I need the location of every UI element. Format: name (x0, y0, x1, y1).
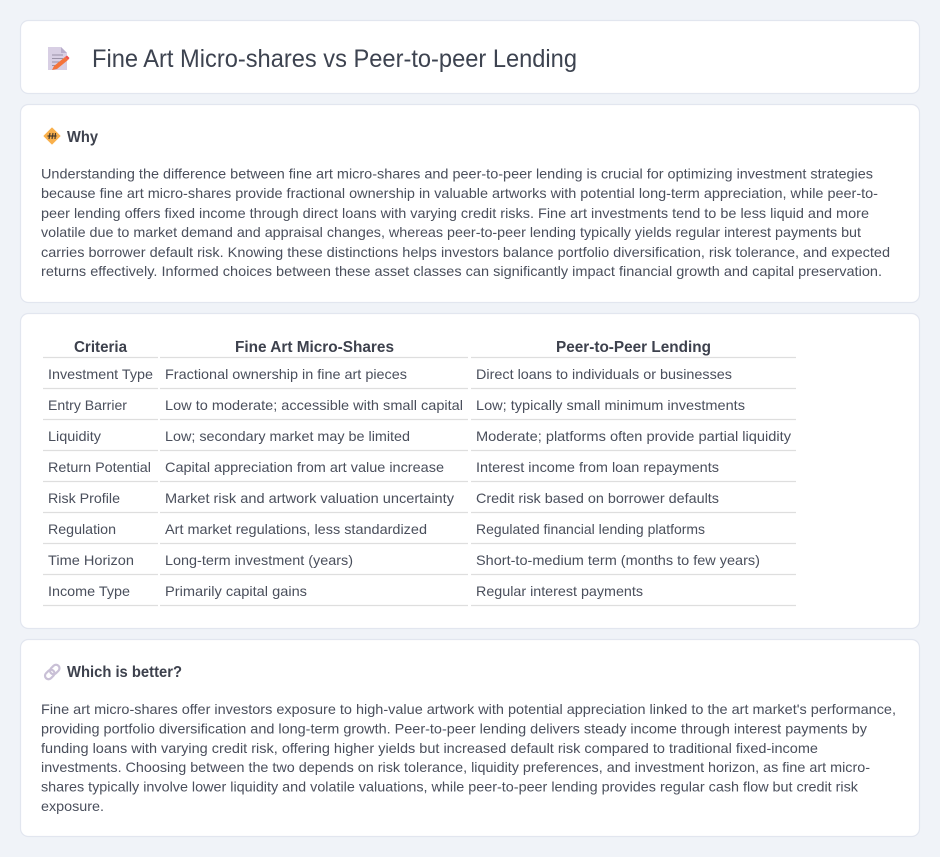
text block: why explanation: because fine art micro-shares provide fractional ownership in valuable artworks with potential long-term appreciation, while peer-to- (41, 185, 878, 201)
table header row (74, 339, 711, 356)
row: risk profile (48, 490, 719, 506)
text block: which is better explanation: Fine art micro-shares offer investors exposure to high-value artwork with potential appreciation linked to the art market's performance, (41, 701, 896, 717)
table header row: Criteria (74, 339, 127, 356)
text block: which is better explanation: shares typically involve lower liquidity and volatile valuations, while peer-to-peer lending provides regular cash flow but credit risk (41, 778, 859, 794)
row: time horizon (48, 552, 760, 568)
row: investment type (48, 366, 732, 382)
panel: which is better (20, 640, 920, 836)
row: risk profile: Credit risk based on borrower defaults (476, 490, 719, 506)
text block: which is better explanation: funding loans with varying credit risk, offering higher yields but increased default risk compared to traditional fixed-income (41, 740, 818, 756)
row: regulation: Regulated financial lending platforms (476, 521, 705, 537)
row: entry barrier: Low; typically small minimum investments (476, 397, 745, 413)
row: return potential (48, 459, 719, 475)
text block: which is better explanation (41, 701, 896, 814)
text block: why explanation: volatile due to market demand and appraisal changes, whereas peer-to-peer lending typically yields regular interest payments but (41, 224, 861, 240)
text block: which is better explanation: providing portfolio diversification and long-term growth. Peer-to-peer lending delivers steady income through interest payments by (41, 720, 867, 736)
heading: which is better: Which is better? (67, 664, 182, 681)
text block: why explanation: Understanding the difference between fine art micro-shares and peer-to-peer lending is crucial for optimizing investment strategies (41, 166, 873, 182)
text block: why explanation: carries borrower default risk. Knowing these distinctions helps investors balance portfolio diversification, risk tolerance, and expected (41, 244, 890, 260)
row: regulation (48, 521, 705, 537)
row: return potential: Return Potential (48, 459, 151, 475)
panel: header (20, 20, 920, 94)
row: income type: Regular interest payments (476, 583, 643, 599)
icon: orange diamond sign (44, 128, 60, 144)
text block: which is better explanation: exposure. (41, 798, 104, 814)
row: risk profile: Risk Profile (48, 490, 120, 506)
text block: why explanation: returns effectively. Informed choices between these asset classes can significantly impact financial growth and capital preservation. (41, 263, 882, 279)
text block: why explanation: peer lending offers fixed income through direct loans with varying credit risks. Fine art investments tend to be less liquid and more (41, 205, 869, 221)
row: return potential: Interest income from loan repayments (476, 459, 719, 475)
row: liquidity (48, 428, 791, 444)
row: investment type: Direct loans to individuals or businesses (476, 366, 732, 382)
row: liquidity: Liquidity (48, 428, 101, 444)
table header row: Fine Art Micro-Shares (235, 339, 394, 356)
heading: why: Why (67, 129, 98, 146)
icon: document with pencil (48, 47, 70, 70)
row: liquidity: Low; secondary market may be limited (165, 428, 410, 444)
icon: link (44, 663, 61, 681)
row: return potential: Capital appreciation from art value increase (165, 459, 444, 475)
row: income type: Primarily capital gains (165, 583, 307, 599)
row: entry barrier (48, 397, 745, 413)
panel: why (20, 104, 920, 302)
row: time horizon: Short-to-medium term (months to few years) (476, 552, 760, 568)
table header row: Peer-to-Peer Lending (556, 339, 711, 356)
row: entry barrier: Low to moderate; accessible with small capital (165, 397, 463, 413)
row: income type: Income Type (48, 583, 130, 599)
row: regulation: Regulation (48, 521, 116, 537)
row: time horizon: Time Horizon (48, 552, 134, 568)
row: investment type: Investment Type (48, 366, 153, 382)
row: risk profile: Market risk and artwork valuation uncertainty (165, 490, 454, 506)
panel: comparison table (20, 314, 920, 628)
row: investment type: Fractional ownership in fine art pieces (165, 366, 407, 382)
row: income type (48, 583, 643, 599)
row: time horizon: Long-term investment (years) (165, 552, 353, 568)
row: entry barrier: Entry Barrier (48, 397, 127, 413)
row: liquidity: Moderate; platforms often provide partial liquidity (476, 428, 791, 444)
text block: which is better explanation: investments. Choosing between the two depends on risk tolerance, liquidity preferences, and investment horizon, as fine art micro- (41, 759, 870, 775)
text block: why explanation (41, 166, 890, 279)
title: Fine Art Micro-shares vs Peer-to-peer Lending (92, 45, 577, 73)
row: regulation: Art market regulations, less standardized (165, 521, 427, 537)
